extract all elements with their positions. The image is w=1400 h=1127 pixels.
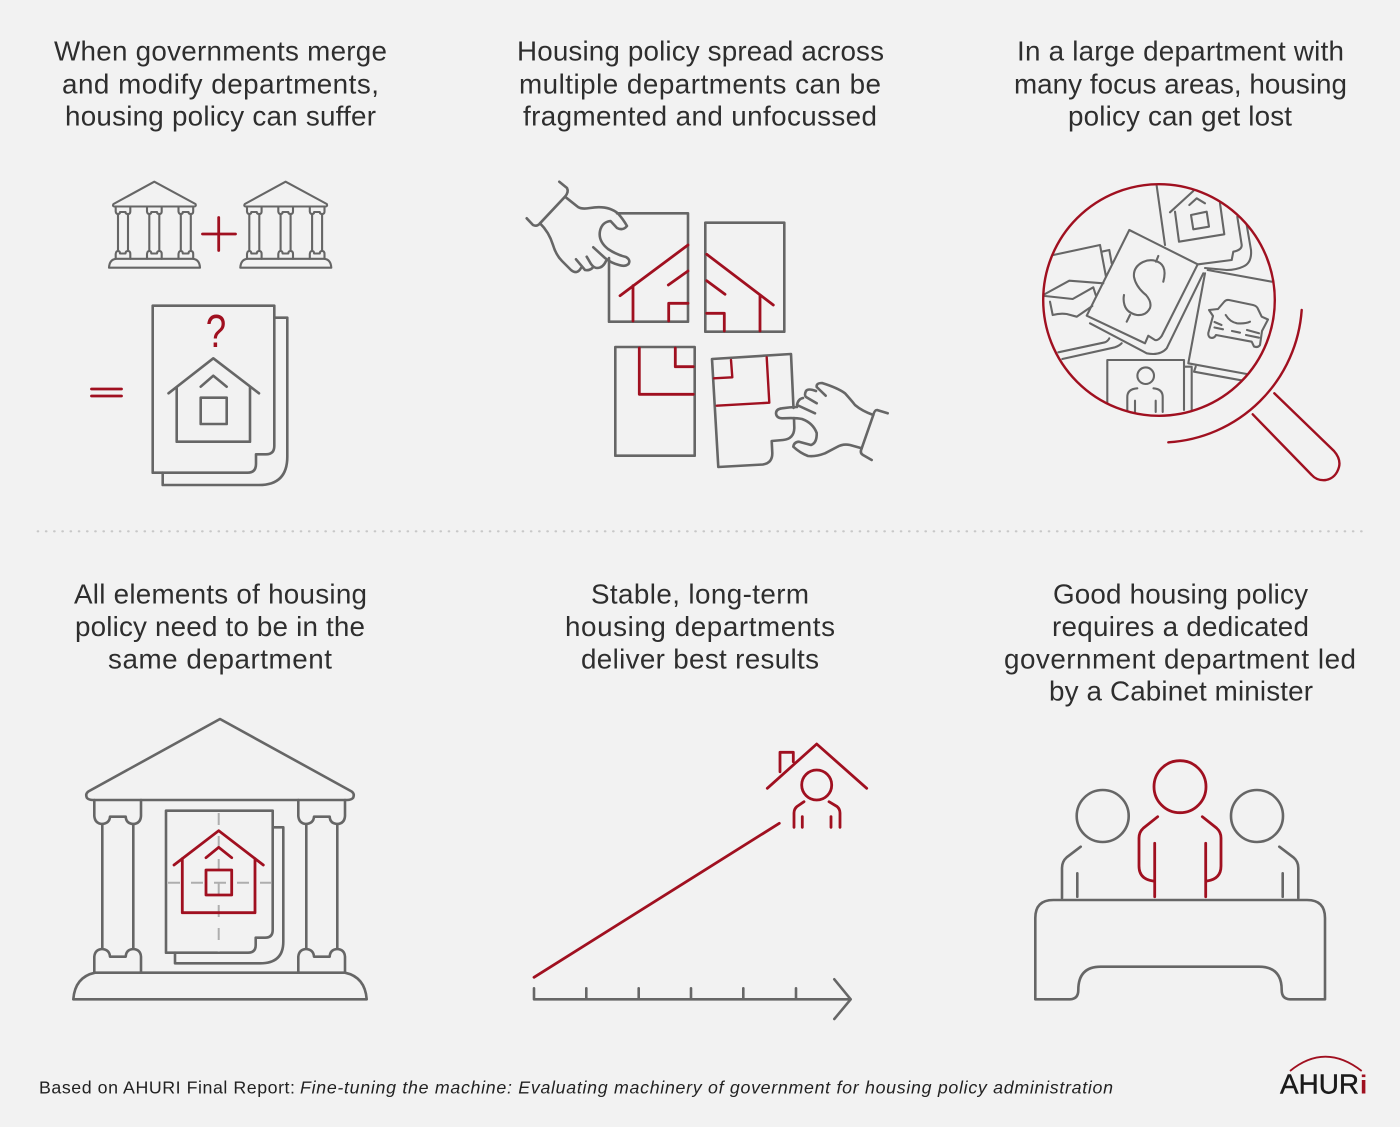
icon: policy document with house and question mark xyxy=(153,305,287,485)
footer: source citation: Based on AHURI Final Report: xyxy=(39,1077,295,1097)
icon: bottom-left puzzle piece xyxy=(615,347,695,456)
logo: AHURI: i xyxy=(1360,1070,1367,1100)
icon: magnifying glass over scattered policy documents xyxy=(1043,184,1339,480)
left colleague xyxy=(1062,790,1129,898)
heading: stable departments: deliver best results xyxy=(581,644,819,674)
panel: same department xyxy=(73,578,367,999)
outer lens arc xyxy=(1168,310,1302,442)
heading: large department xyxy=(1014,36,1347,132)
logo: AHURI: AHUR xyxy=(1280,1069,1359,1100)
trend line xyxy=(534,823,779,977)
divider: dotted line xyxy=(38,530,1362,532)
heading: merged departments xyxy=(54,36,387,132)
icon: top-left puzzle piece held by hand xyxy=(527,182,688,322)
heading: dedicated department: requires a dedicated xyxy=(1052,611,1309,642)
icon: equals sign xyxy=(92,389,122,396)
heading: merged departments: and modify departments, xyxy=(62,68,379,99)
panel: dedicated department xyxy=(1004,578,1356,999)
icon: minister and colleagues at a table xyxy=(1035,761,1325,999)
question mark: ? xyxy=(206,305,226,357)
panel: fragmented policy xyxy=(517,36,888,467)
lens ring xyxy=(1043,184,1275,416)
icon: bottom-right puzzle piece held by hand xyxy=(712,354,888,467)
heading: large department: many focus areas, housing xyxy=(1014,68,1347,99)
scattered documents inside the lens xyxy=(1045,186,1272,412)
chart: rising line over time xyxy=(534,744,867,1019)
icon: first government building xyxy=(109,182,200,268)
table xyxy=(1035,900,1325,999)
magnifier handle xyxy=(1253,393,1339,480)
heading: merged departments: When governments merge xyxy=(54,36,387,67)
heading: dedicated department: by a Cabinet minister xyxy=(1049,676,1313,706)
heading: fragmented policy xyxy=(517,36,884,132)
minister in red xyxy=(1139,761,1221,897)
heading: dedicated department: Good housing policy xyxy=(1053,578,1308,610)
heading: dedicated department: government department led xyxy=(1004,644,1356,674)
panel: large department xyxy=(1014,36,1347,480)
icon: plus sign xyxy=(202,218,236,250)
heading: fragmented policy: multiple departments can be xyxy=(519,68,881,99)
heading: stable departments: housing departments xyxy=(565,611,835,642)
heading: stable departments: Stable, long-term xyxy=(591,578,809,610)
heading: large department: In a large department with xyxy=(1017,36,1344,67)
heading: same department: All elements of housing xyxy=(74,578,367,610)
heading: fragmented policy: Housing policy spread across xyxy=(517,36,884,67)
heading: same department xyxy=(74,578,367,674)
time axis with ticks and arrow xyxy=(534,979,851,1019)
heading: dedicated department xyxy=(1004,578,1356,706)
heading: same department: same department xyxy=(108,644,332,674)
heading: fragmented policy: fragmented and unfocussed xyxy=(523,100,877,132)
logo: AHURI xyxy=(1280,1057,1367,1100)
panel: stable departments xyxy=(534,578,867,1019)
heading: same department: policy need to be in the xyxy=(75,611,365,642)
footer: source citation: Fine-tuning the machine: Evaluating machinery of government for housing policy administration xyxy=(300,1077,1113,1097)
icon: person under a house roof xyxy=(767,744,867,827)
right colleague xyxy=(1231,790,1298,898)
policy document xyxy=(166,811,283,963)
heading: large department: policy can get lost xyxy=(1068,100,1292,132)
icon: department building housing a policy document xyxy=(73,719,367,999)
icon: second government building xyxy=(240,182,331,268)
heading: merged departments: housing policy can suffer xyxy=(65,100,376,132)
panel: merged departments xyxy=(54,36,387,485)
icon: top-right puzzle piece xyxy=(705,223,784,332)
heading: stable departments xyxy=(565,578,835,674)
